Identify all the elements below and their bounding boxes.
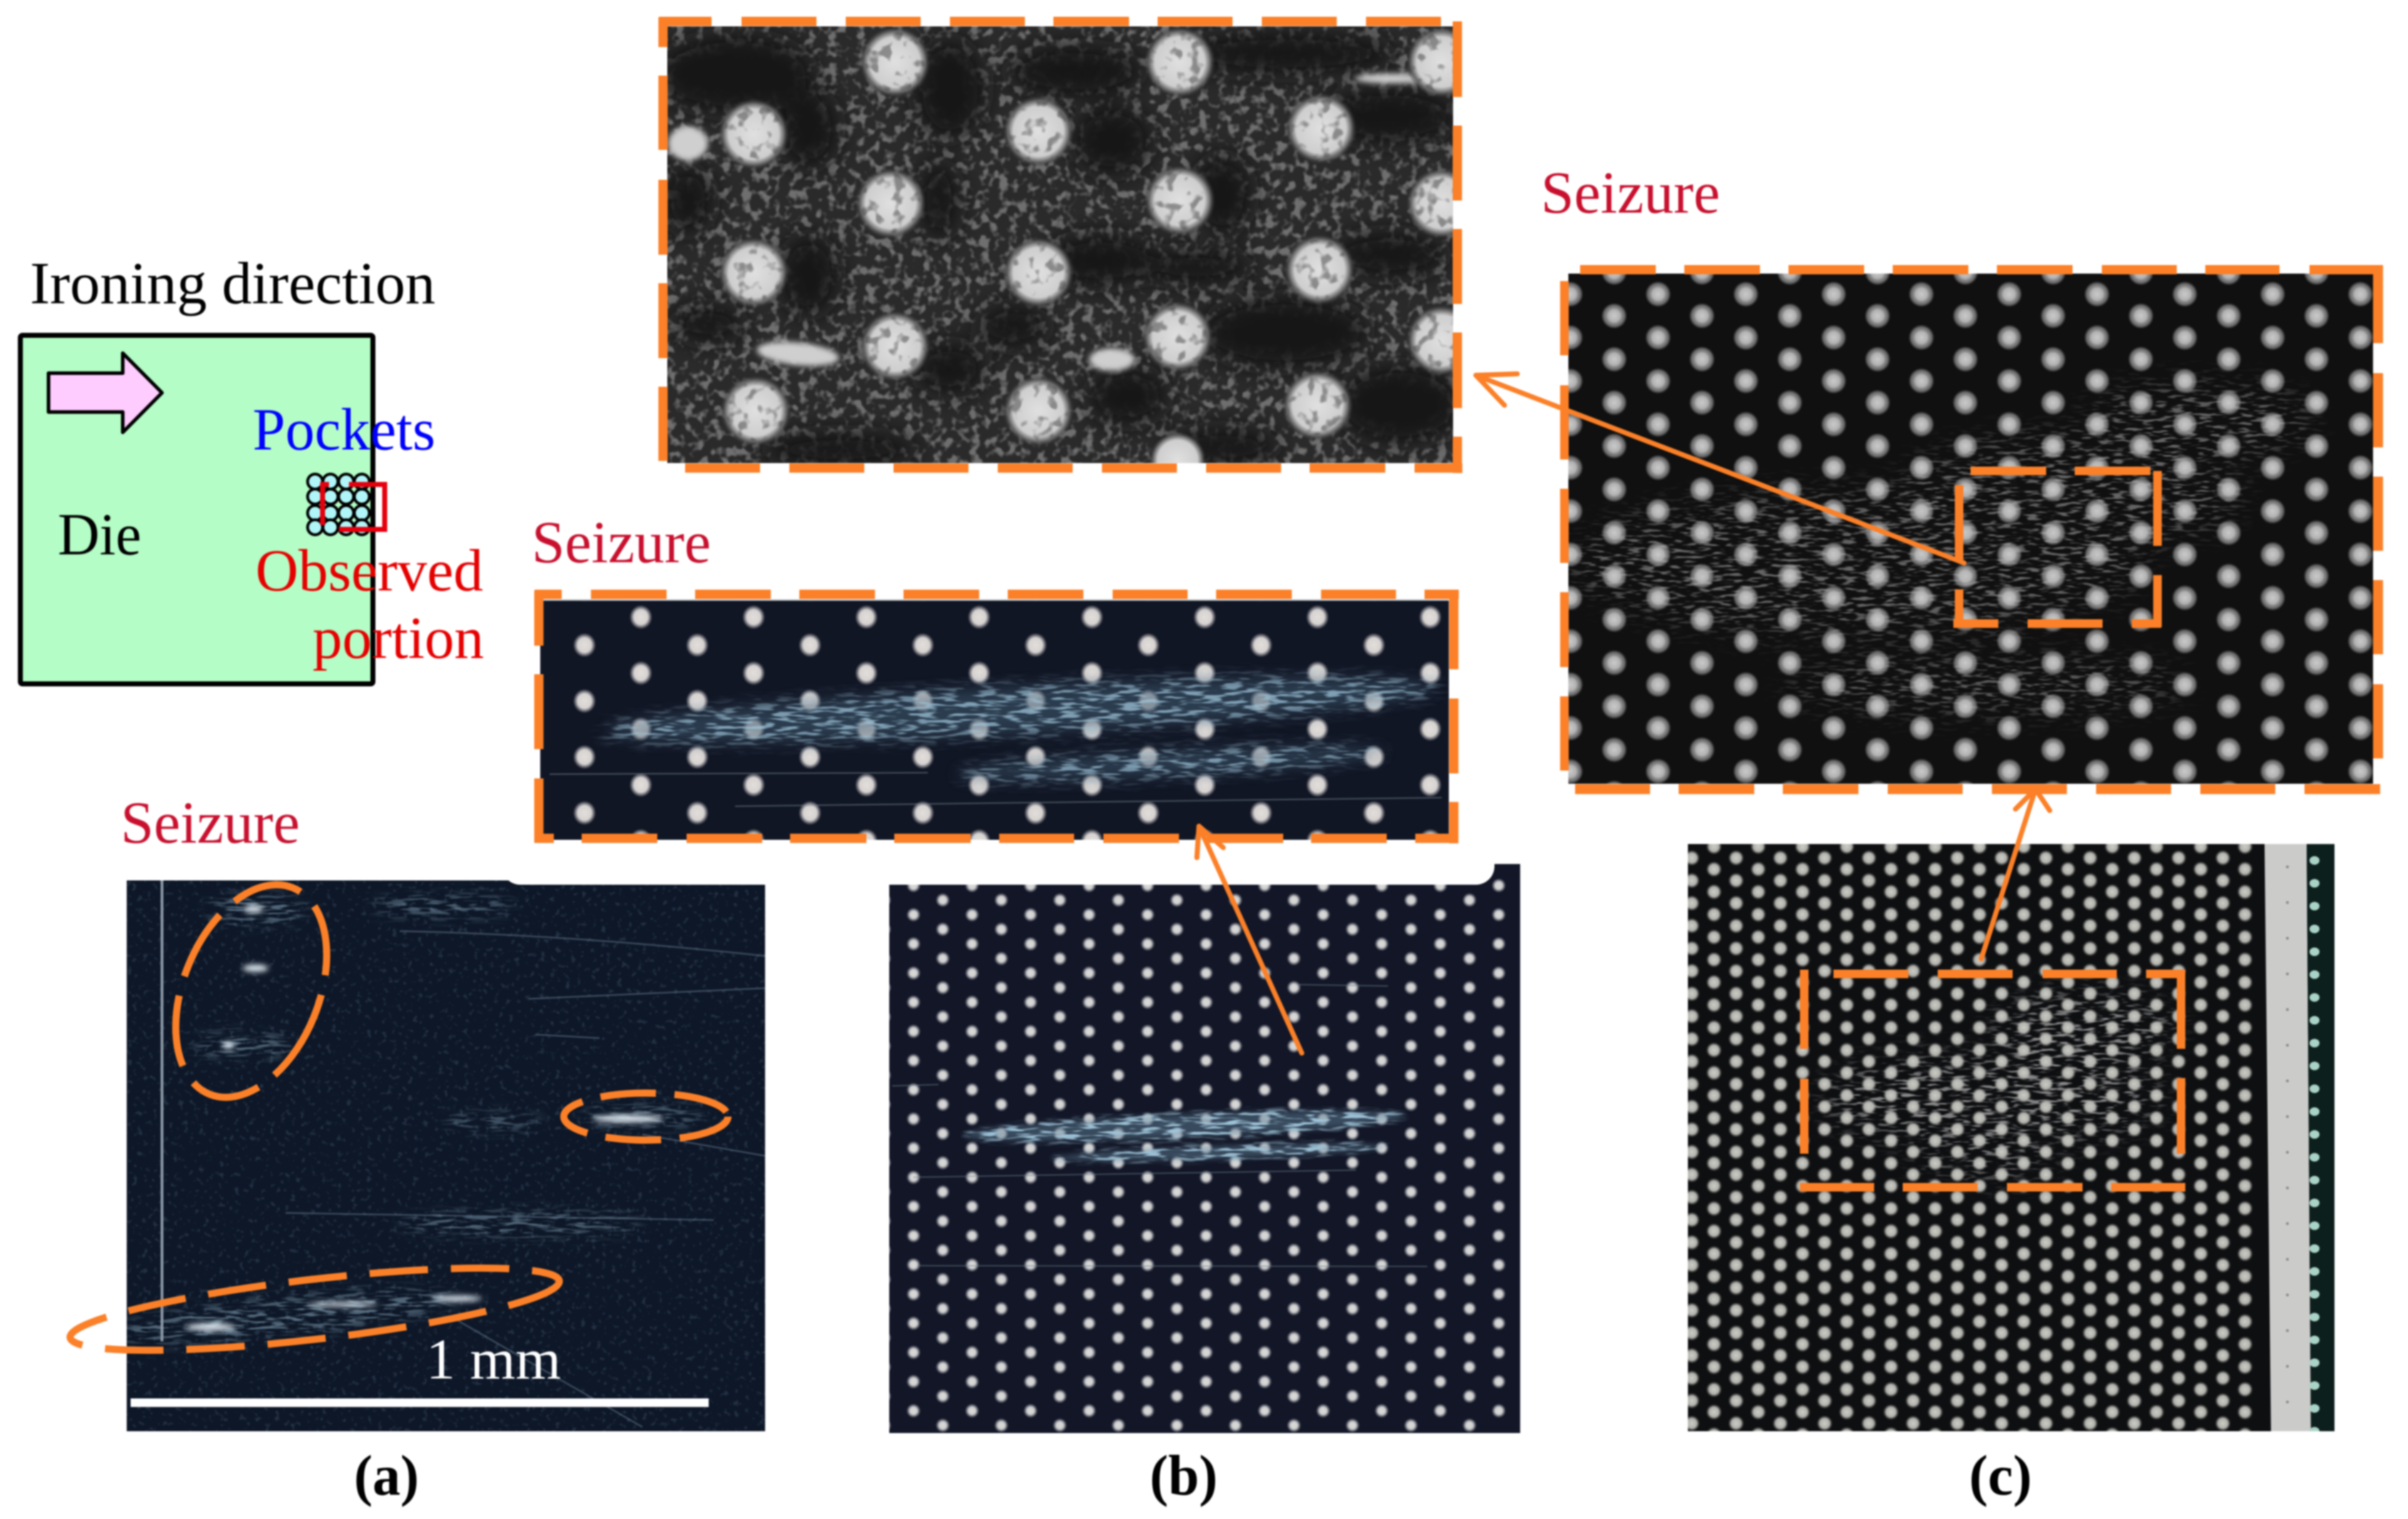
die body [20, 335, 373, 684]
photo background [127, 880, 765, 1431]
seizure ellipse 3 [66, 1251, 563, 1367]
pockets grid [308, 474, 370, 535]
label: die: Die [58, 502, 141, 568]
pocket dots [889, 864, 1520, 1433]
photo background [1688, 844, 2334, 1431]
bright debris [668, 73, 1429, 371]
top edge [540, 599, 1449, 601]
dashed selection box [1800, 970, 2185, 1187]
label: seizure (middle): Seizure [532, 509, 711, 576]
arrow: inset to enlarged seizure [1476, 374, 1964, 563]
light edge strip [2265, 844, 2311, 1431]
pocket surface texture [667, 26, 1453, 463]
dashed frame [535, 591, 1459, 843]
scratches [892, 985, 1427, 1266]
label: pockets: Pockets [253, 397, 435, 463]
label: observed portion: Observed [256, 538, 483, 604]
photo background [1569, 274, 2373, 783]
arrow: ironing direction [49, 353, 162, 432]
photo background [889, 864, 1520, 1433]
seizure grain [1569, 274, 2373, 783]
seizure streaks [961, 1106, 1405, 1166]
panel (b): micrograph [889, 864, 1520, 1433]
arrow: (b) to enlarged view [1197, 826, 1302, 1053]
seizure ellipse 2 [564, 1093, 728, 1140]
scratches [285, 931, 765, 1427]
dashed frame: seizure enlarged [659, 17, 1462, 473]
seizure marks [126, 889, 705, 1351]
vertical line [161, 880, 163, 1341]
dark green edge [2307, 844, 2334, 1431]
pocket dots [1569, 274, 2373, 783]
strip micro dots [2277, 844, 2298, 1431]
observed portion marker [323, 484, 385, 529]
seizure glow [606, 666, 1435, 786]
heading: ironing direction: Ironing direction [30, 250, 435, 317]
scale label: 1 mm [426, 1329, 561, 1391]
bright spots [186, 905, 664, 1331]
label: seizure (a): Seizure [121, 790, 300, 856]
panel (a): micrograph [66, 863, 765, 1431]
seizure glow [963, 1104, 1406, 1164]
panel: die schematic [20, 250, 484, 684]
label: seizure (top right): Seizure [1541, 160, 1720, 226]
inner dashed selection box [1953, 471, 2161, 627]
caption (c): (c) [1969, 1445, 2032, 1508]
panel: enlarged view of seizure [657, 26, 1477, 489]
caption (a): (a) [354, 1445, 419, 1508]
caption (b): (b) [1150, 1445, 1218, 1508]
scale bar [131, 1398, 709, 1407]
panel (c): micrograph [1688, 844, 2334, 1431]
label: observed portion: portion [313, 605, 484, 671]
panel: enlarged view of (b) [535, 591, 1459, 843]
panel: enlarged view of (c) [1564, 269, 2383, 789]
photo background [540, 600, 1449, 840]
scratches [550, 773, 1442, 806]
seizure streaks [1799, 970, 2198, 1199]
dark regions [657, 32, 1462, 467]
seizure streaks [596, 668, 1446, 791]
seizure speckle [127, 880, 765, 1431]
label: observed portion [256, 538, 484, 671]
photo background [667, 26, 1453, 463]
grain texture [667, 26, 1453, 463]
pocket dots [1688, 844, 2255, 1431]
pocket dots [540, 600, 1449, 840]
white rounded cover behind the enlarged view [502, 821, 1494, 885]
dashed frame [1564, 269, 2383, 789]
arrow: (c) to enlarged view [1981, 789, 2050, 959]
green edge dots [2308, 844, 2325, 1431]
seizure ellipse 1 [146, 863, 356, 1119]
pockets [718, 26, 1477, 489]
